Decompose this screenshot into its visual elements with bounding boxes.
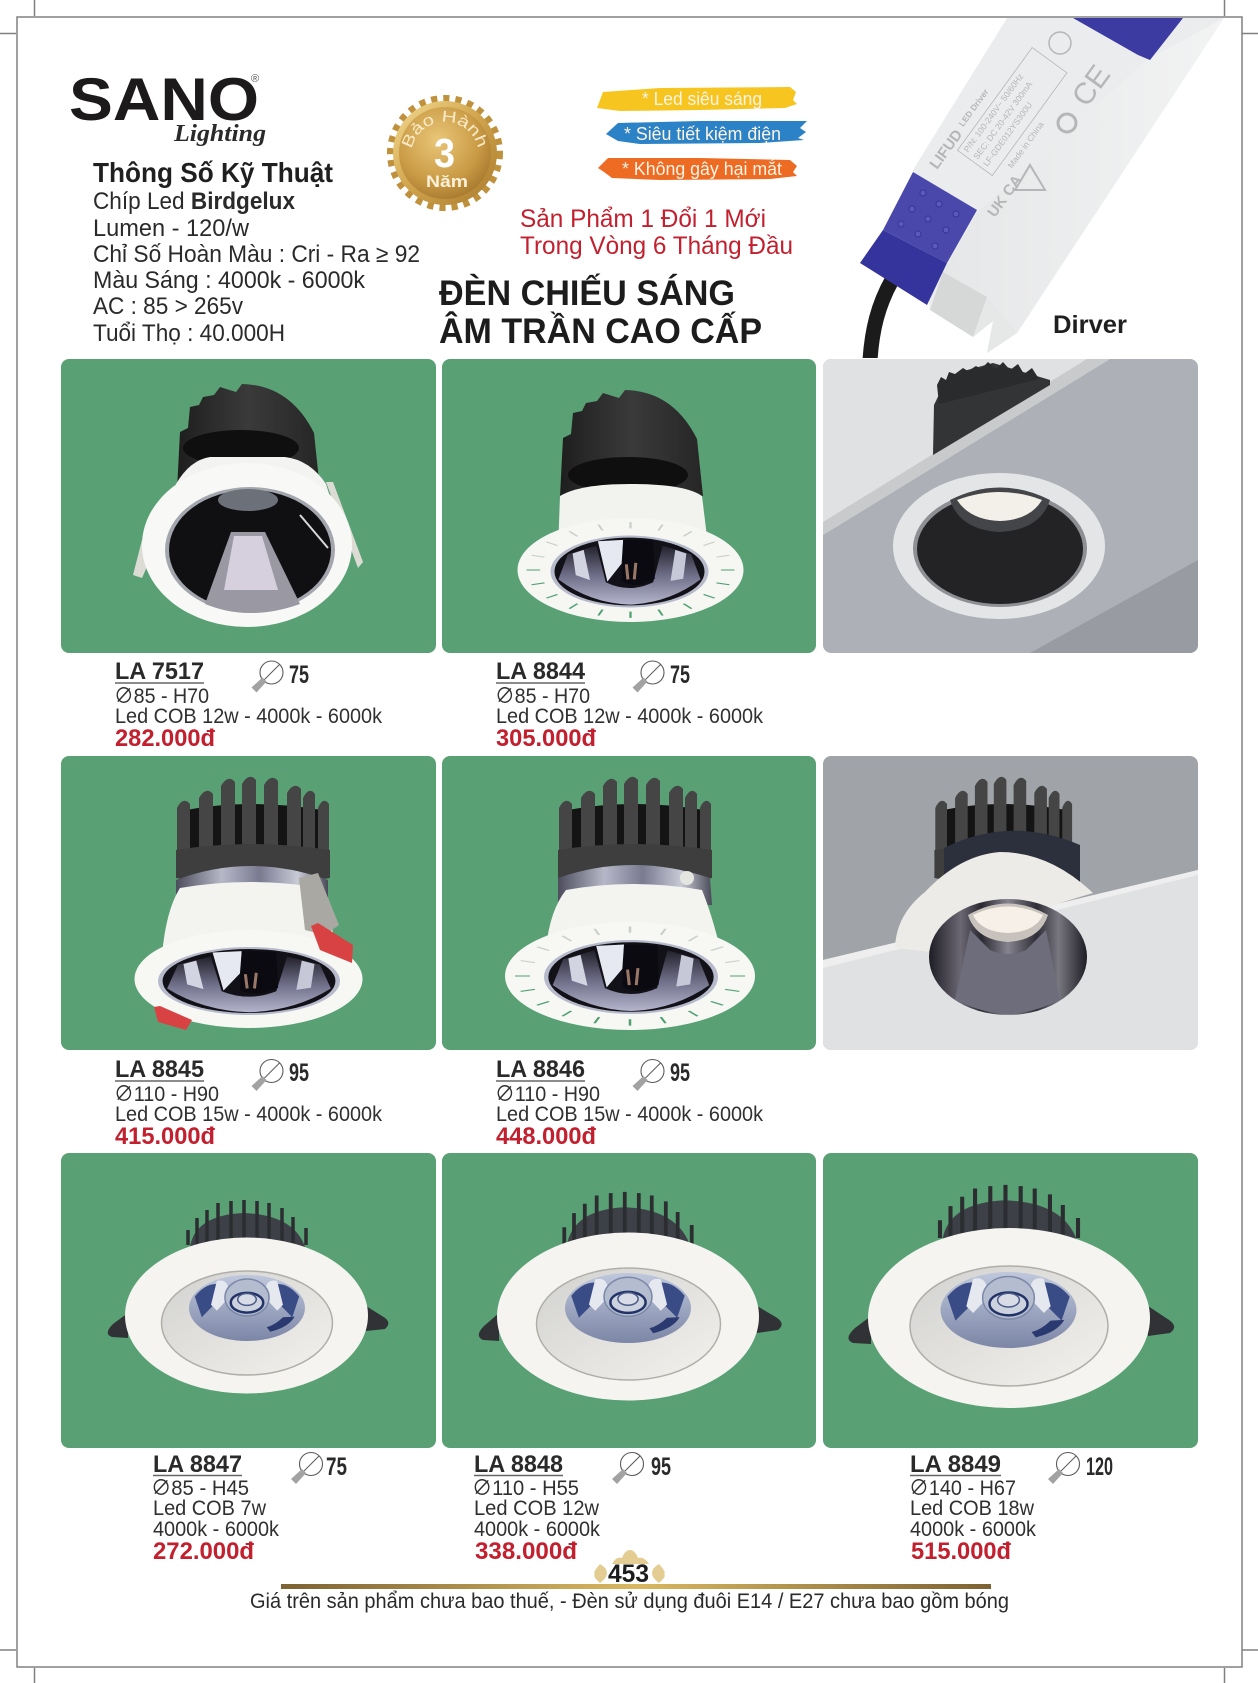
feature tag: yellow brush: * Led siêu sáng [642,89,762,109]
caption: LA 8847: 4000k - 6000k [153,1518,279,1541]
caption: LA 8846: 448.000đ [496,1123,596,1150]
driver caption: Dirver [1053,311,1127,339]
caption: LA 8849: 120 [1086,1453,1113,1481]
page number with ornament: 453 [608,1560,649,1588]
caption: LA 8844: ∅85 - H70 [495,685,590,708]
panel: LA 8845 product photo [61,756,436,1050]
caption: LA 8849: 515.000đ [911,1538,1011,1565]
technical specifications text block: Chíp Led Birdgelux [93,188,296,215]
caption: LA 7517: 75 [289,661,309,689]
panel: LA 8847 product photo [61,1153,436,1448]
logo: SANO Lighting: SANO [69,66,259,133]
feature tag: yellow brush [597,87,797,111]
caption: LA 8849 [909,1451,1113,1565]
panel: ceiling photo, chrome reflector [823,756,1198,1050]
caption: LA 8847: 272.000đ [153,1538,254,1565]
technical specifications text block: Lumen - 120/w [93,215,250,242]
caption: LA 8848: 338.000đ [475,1538,577,1565]
caption: LA 7517: 282.000đ [115,725,215,752]
panel: ceiling photo, black reflector [823,359,1198,653]
feature tag: blue brush: * Siêu tiết kiệm điện [624,124,781,144]
driver illustration: UK CA [984,172,1026,220]
caption: LA 8848 [472,1451,671,1565]
red warranty exchange note: Trong Vòng 6 Tháng Đầu [520,232,793,260]
caption: LA 7517: ∅85 - H70 [114,685,209,708]
driver illustration [860,17,1224,360]
warranty badge: 3 years [387,95,503,211]
caption: LA 8846: Led COB 15w - 4000k - 6000k [496,1103,763,1126]
technical specifications text block: Chỉ Số Hoàn Màu : Cri - Ra ≥ 92 [93,241,420,268]
caption: LA 8847: LA 8847 [153,1451,242,1478]
driver illustration: LF-GDE012YS300U [981,100,1034,168]
caption: LA 8845: 415.000đ [115,1123,215,1150]
caption: LA 8848: 4000k - 6000k [474,1518,600,1541]
driver illustration: CE [1066,59,1117,112]
warranty badge: 3 years: Năm [426,172,468,191]
technical specifications text block [93,157,420,347]
red warranty exchange note [520,205,793,260]
caption: LA 8844: 305.000đ [496,725,596,752]
driver illustration: SEC: DC 20-42V 300mA [971,79,1034,161]
warranty badge: 3 years: Bảo Hành [402,110,486,148]
caption: LA 8847: 75 [326,1453,347,1481]
driver illustration: P/N: 100-240V~ 50/60Hz [961,72,1025,154]
caption: LA 8846: ∅110 - H90 [495,1083,600,1106]
footer gold rule [281,1584,991,1589]
main heading: ĐÈN CHIẾU SÁNG [439,273,735,313]
footer note: Giá trên sản phẩm chưa bao thuế, - Đèn sử dụng đuôi E14 / E27 chưa bao gồm bóng [250,1590,1009,1613]
caption: LA 8848: Led COB 12w [474,1497,600,1520]
caption: LA 8844: LA 8844 [496,658,586,685]
caption: LA 8849: 4000k - 6000k [910,1518,1036,1541]
caption: LA 8847: ∅85 - H45 [151,1477,249,1500]
logo: SANO Lighting: ® [251,73,259,85]
technical specifications text block: Màu Sáng : 4000k - 6000k [93,267,366,294]
caption: LA 8845: Led COB 15w - 4000k - 6000k [115,1103,382,1126]
panel: LA 8846 product photo [442,756,816,1050]
panel: LA 8848 product photo [442,1153,816,1448]
logo: SANO Lighting: Lighting [173,121,266,147]
main heading [439,273,762,351]
caption: LA 8845: 95 [289,1059,309,1087]
caption: LA 7517: LA 7517 [115,658,204,685]
technical specifications text block: AC : 85 > 265v [93,293,243,320]
main heading: ÂM TRẦN CAO CẤP [439,311,762,351]
caption: LA 8847 [151,1451,347,1565]
caption: LA 7517: Led COB 12w - 4000k - 6000k [115,705,382,728]
driver illustration: LIFUD [926,126,966,172]
warranty badge: 3 years: 3 [434,130,455,176]
technical specifications text block: Tuổi Thọ : 40.000H [93,320,285,347]
driver illustration: Made in China [1006,120,1046,170]
caption: LA 8849: Led COB 18w [910,1497,1035,1520]
caption: LA 8848: ∅110 - H55 [472,1477,579,1500]
caption: LA 8848: 95 [651,1453,671,1481]
feature tag: orange brush: * Không gây hại mắt [622,158,782,179]
caption: LA 8844: 75 [670,661,690,689]
caption: LA 8846: LA 8846 [496,1056,585,1083]
caption: LA 8844: Led COB 12w - 4000k - 6000k [496,705,763,728]
panel: LA 8844 product photo [442,359,816,653]
caption: LA 8845: LA 8845 [115,1056,204,1083]
caption: LA 8846 [495,1056,763,1150]
driver illustration: LED Driver [957,86,991,128]
caption: LA 8845: ∅110 - H90 [114,1083,219,1106]
red warranty exchange note: Sản Phẩm 1 Đổi 1 Mới [520,205,766,233]
caption: LA 8848: LA 8848 [474,1451,563,1478]
caption: LA 8849: LA 8849 [910,1451,1001,1478]
caption: LA 8849: ∅140 - H67 [909,1477,1016,1500]
panel: LA 8849 product photo [823,1153,1198,1448]
caption: LA 7517 [114,658,382,752]
caption: LA 8844 [495,658,763,752]
feature tag: blue brush [606,121,807,144]
technical specifications text block: Thông Số Kỹ Thuật [93,157,333,188]
caption: LA 8846: 95 [670,1059,690,1087]
caption: LA 8845 [114,1056,382,1150]
caption: LA 8847: Led COB 7w [153,1497,267,1520]
page number with ornament [594,1550,665,1588]
panel: LA 7517 product photo [61,359,436,653]
